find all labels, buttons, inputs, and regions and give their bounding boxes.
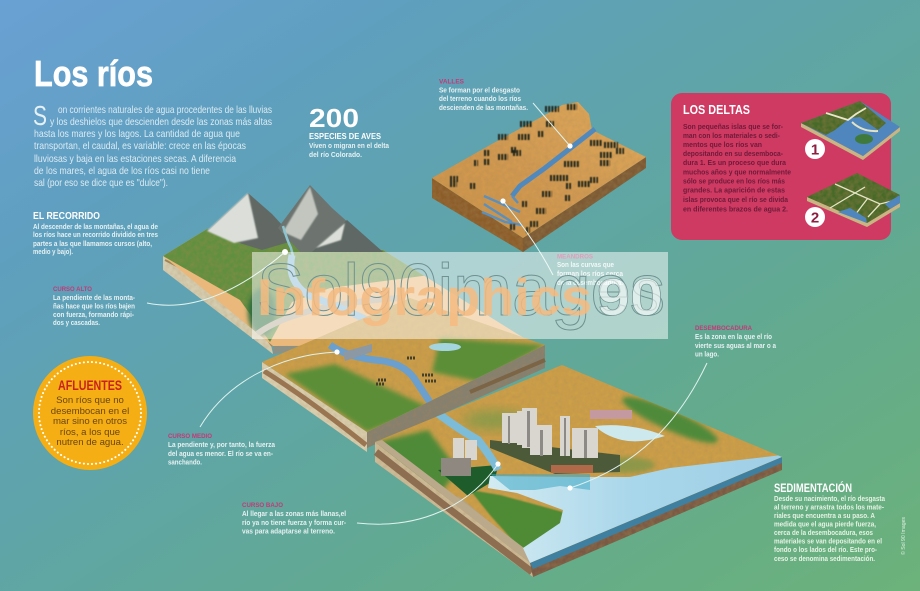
trees — [450, 107, 624, 230]
text: curso medio: del agua es menor. El río se va en- — [168, 451, 274, 458]
watermark: Infographics — [257, 269, 592, 327]
text: sedimentación: al terreno y arrastra todos los mate- — [774, 505, 885, 512]
text: meandros: MEANDROS — [557, 254, 594, 260]
text: meandros: Son las curvas que — [557, 262, 614, 269]
badge: afluentes: ríos, a los que — [60, 427, 120, 438]
text: valles: Se forman por el desgasto — [439, 88, 520, 94]
badge: afluentes: Son ríos que no — [56, 395, 124, 406]
badge: afluentes: AFLUENTES — [58, 377, 122, 393]
text: meandros: de la desembocadura. — [557, 280, 623, 287]
text: curso alto: La pendiente de las monta- — [53, 295, 136, 302]
intro text: on corrientes naturales de agua procedentes de las lluvias — [58, 104, 272, 116]
number marker 1: 1 — [811, 142, 819, 158]
intro text — [33, 100, 272, 189]
watermark: 90 — [597, 269, 663, 327]
badge: afluentes: mar sino en otros — [53, 416, 127, 427]
text: curso alto: CURSO ALTO — [53, 286, 92, 293]
panel: los deltas: mentos que los ríos van — [683, 142, 762, 149]
text: el recorrido: los ríos hace un recorrido dividido en tres — [33, 232, 158, 239]
text: valles: descienden de las montañas. — [439, 105, 528, 112]
text: el recorrido: Al descender de las montañas, el agua de — [33, 224, 158, 231]
callout dots — [282, 143, 573, 491]
text: curso medio: La pendiente y, por tanto, la fuerza — [168, 442, 275, 449]
text: curso alto — [53, 286, 136, 327]
intro text: sal (por eso se dice que es "dulce"). — [34, 177, 168, 189]
text: sedimentación: materiales se van depositando en el — [774, 538, 882, 546]
intro text: S — [33, 100, 47, 131]
text: desembocadura — [695, 325, 776, 358]
panel: los deltas: islas provoca que el río se divida — [683, 197, 788, 204]
text: curso bajo: Al llegar a las zonas más llanas,el — [242, 511, 346, 518]
panel: los deltas: dura 1. Es un proceso que dura — [683, 160, 786, 167]
text: curso bajo: vas para adaptarse al terreno. — [242, 528, 335, 536]
stat: 200 species of birds: del río Colorado. — [309, 152, 362, 159]
city buildings — [441, 408, 632, 476]
panel: los deltas: man con los materiales o sedi- — [683, 133, 781, 140]
illustration: middle course block — [255, 295, 550, 452]
illustration: lower course block with city and delta — [370, 360, 790, 577]
badge: afluentes: desembocan en el — [51, 406, 129, 417]
text: el recorrido: medio y bajo). — [33, 249, 73, 256]
callout leader lines — [147, 103, 707, 524]
text: el recorrido: partes a las que llamamos cursos (alto, — [33, 241, 152, 248]
text: curso bajo: CURSO BAJO — [242, 502, 283, 509]
intro text: transportan, el caudal, es variable: crece en las épocas — [34, 140, 246, 152]
stat: 200 species of birds: Viven o migran en el delta — [309, 143, 389, 150]
text: el recorrido — [33, 211, 158, 256]
illustration: valley block — [432, 102, 646, 252]
panel: los deltas: depositando en su desemboca- — [683, 151, 784, 158]
stat: 200 species of birds: 200 — [309, 103, 359, 133]
watermark: Sol90images — [257, 250, 665, 331]
illustration: upper course block with mountains — [160, 185, 540, 354]
number marker 1 — [805, 139, 825, 159]
panel: los deltas — [671, 93, 900, 240]
text: valles — [439, 78, 528, 112]
text: sedimentación: SEDIMENTACIÓN — [774, 482, 852, 495]
text: sedimentación — [774, 482, 885, 563]
mountain peaks — [207, 185, 383, 256]
badge: afluentes — [33, 356, 147, 470]
text: sedimentación: medida que el agua pierde fuerza, — [774, 522, 876, 528]
text: valles: VALLES — [439, 78, 465, 86]
text: curso alto: con fuerza, formando rápi- — [53, 312, 135, 319]
intro text: lluviosas y baja en las estaciones secas. A diferencia — [34, 153, 236, 165]
intro text: de los mares, el agua de los ríos casi no tiene — [34, 165, 210, 177]
panel: los deltas: en diferentes brazos de agua 2. — [683, 206, 788, 214]
panel: los deltas: LOS DELTAS — [683, 102, 750, 117]
text: meandros: forman los ríos cerca — [557, 271, 623, 278]
text: curso alto: dos y cascadas. — [53, 320, 100, 327]
text: desembocadura: Es la zona en la que el río — [695, 334, 772, 341]
text: desembocadura: un lago. — [695, 352, 719, 358]
credit: © Sol 90 Images — [900, 516, 907, 555]
text: sedimentación: fondo o los lados del río. Este pro- — [774, 547, 878, 554]
panel: los deltas: sólo se produce en los ríos más — [683, 178, 785, 186]
text: sedimentación: Desde su nacimiento, el río desgasta — [774, 496, 885, 503]
text: valles: del terreno cuando los ríos — [439, 96, 521, 103]
stat: 200 species of birds — [309, 103, 389, 159]
intro text: y los deshielos que descienden desde las zonas más altas — [50, 116, 272, 128]
text: curso medio — [168, 433, 275, 466]
text: sedimentación: riales que encuentra a su paso. A — [774, 513, 875, 520]
number marker 2: 2 — [811, 210, 819, 226]
text: meandros — [557, 254, 623, 287]
stat: 200 species of birds: ESPECIES DE AVES — [309, 131, 381, 141]
text: curso bajo — [242, 502, 347, 536]
intro text: hasta los mares y los lagos. La cantidad de agua que — [34, 128, 240, 140]
text: curso medio: sanchando. — [168, 460, 202, 466]
panel: los deltas: Son pequeñas islas que se for- — [683, 124, 784, 131]
text: desembocadura: vierte sus aguas al mar o a — [695, 343, 776, 350]
text: sedimentación: ceso se denomina sedimentación. — [774, 556, 875, 563]
panel: los deltas: muchos años y que normalmente — [683, 170, 791, 176]
text: desembocadura: DESEMBOCADURA — [695, 325, 752, 332]
number marker 2 — [805, 207, 825, 227]
text: el recorrido: EL RECORRIDO — [33, 211, 100, 222]
title: Los ríos — [34, 53, 153, 94]
text: curso medio: CURSO MEDIO — [168, 433, 212, 440]
text: curso alto: ñas hace que los ríos bajen — [53, 304, 135, 310]
delta diagram 2 — [807, 173, 900, 227]
text: curso bajo: río ya no tiene fuerza y forma cur- — [242, 520, 347, 527]
panel: los deltas: grandes. La aparición de estas — [683, 188, 785, 194]
badge: afluentes: nutren de agua. — [56, 437, 124, 448]
delta diagram 1 — [801, 101, 900, 160]
text: sedimentación: cerca de la desembocadura, esos — [774, 530, 873, 537]
